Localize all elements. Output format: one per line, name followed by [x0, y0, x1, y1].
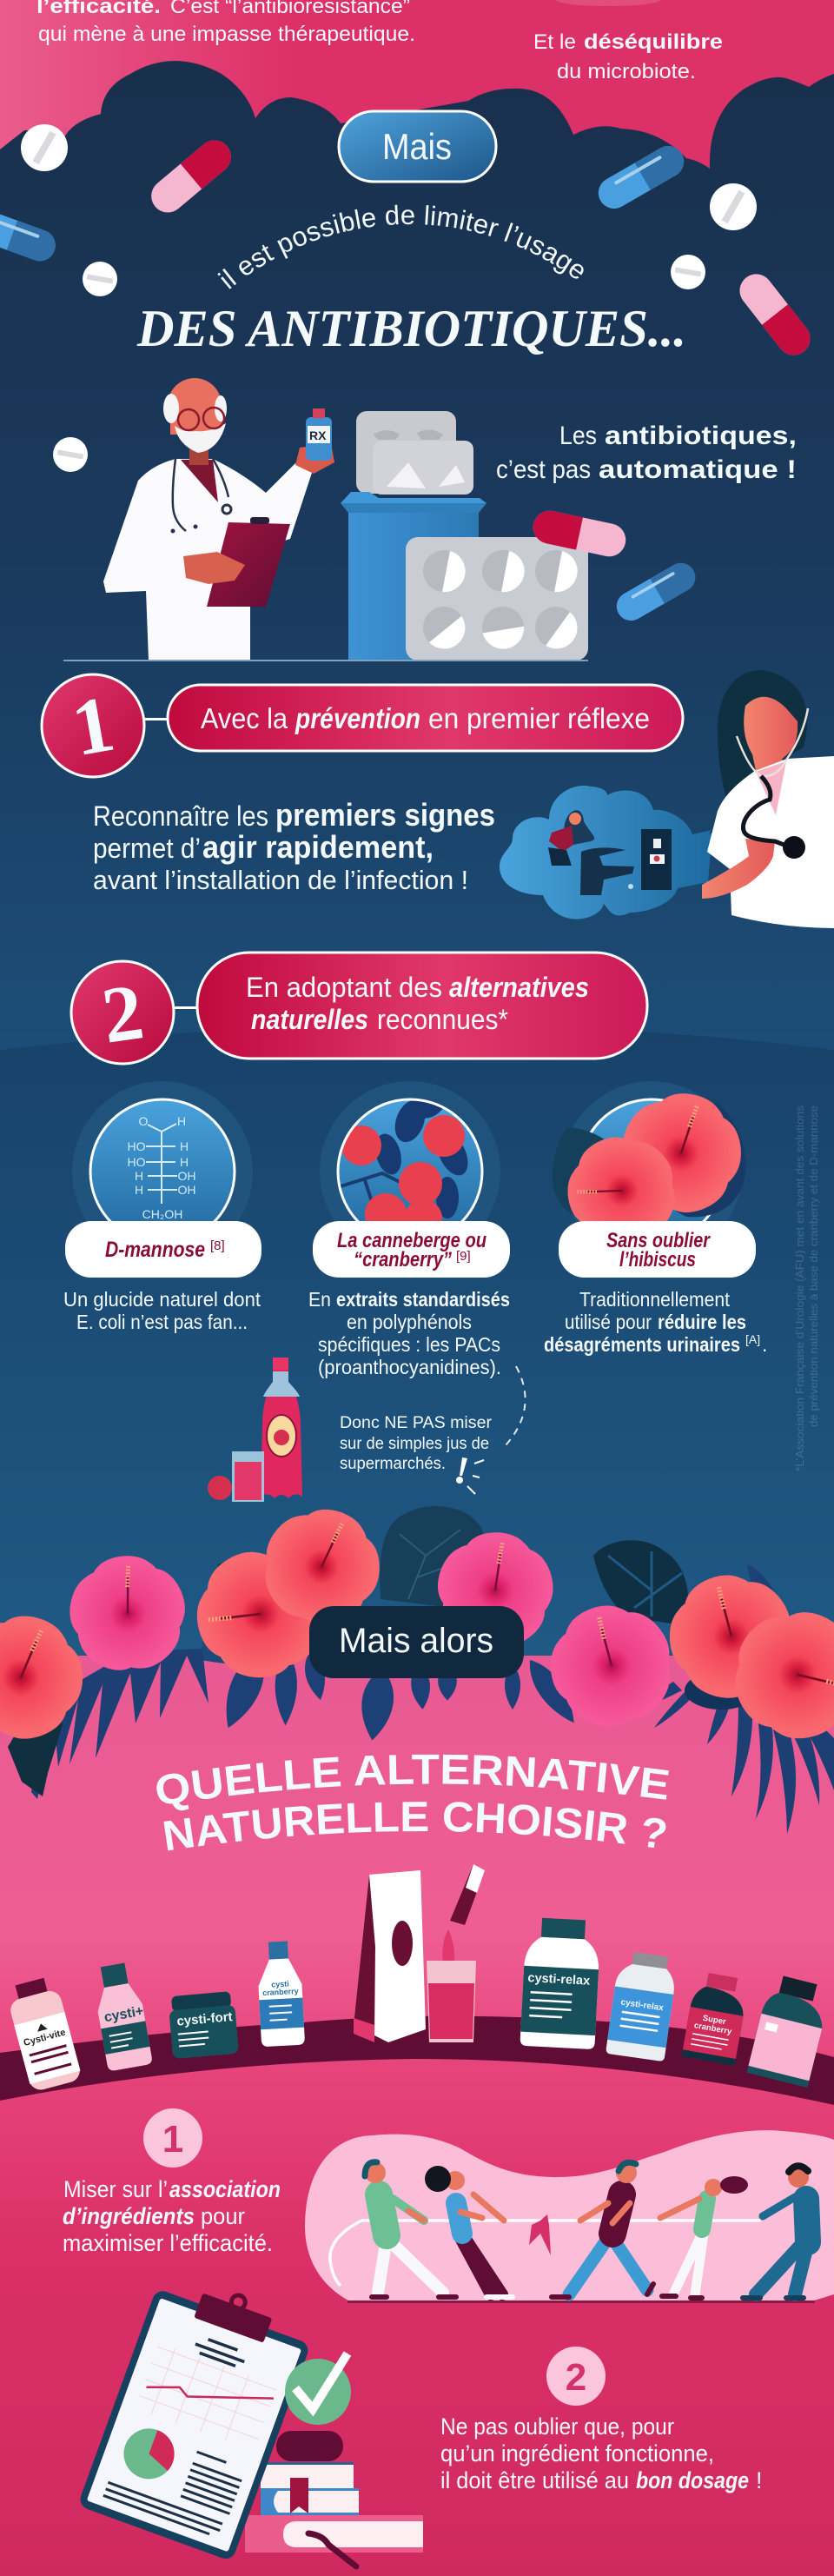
description: canneberge: extraits standardisés [336, 1288, 510, 1311]
navy cloud background [0, 61, 834, 1660]
text: bon dosage: bon dosage [636, 2467, 749, 2493]
product: cysti cranberry: cysti [271, 1979, 289, 1989]
description: hibiscus [544, 1288, 767, 1356]
report text lines [103, 2427, 246, 2539]
panel: D-mannose [63, 1081, 261, 1333]
description: hibiscus: réduire les [658, 1311, 746, 1333]
text: premiers signes [93, 797, 495, 895]
hanging blue leaves [215, 1645, 584, 1743]
footnote rotated [794, 1105, 820, 1471]
panel: D-mannose: CH₂OH [142, 1207, 182, 1221]
heading: quelle alternative [156, 1754, 669, 1851]
pill: prevention: en premier réflexe [428, 702, 650, 734]
number circle 1 [42, 674, 144, 777]
pink lower background [0, 1656, 834, 2576]
text: note on juices [340, 1414, 493, 1473]
glass [232, 1451, 264, 1502]
text: association d'ingredients: pour [201, 2203, 245, 2229]
panel: D-mannose: H [177, 1114, 186, 1128]
text: association d'ingredients: maximiser l’efficacité. [63, 2230, 273, 2256]
description: hibiscus: désagréments urinaires [544, 1333, 740, 1356]
text: note on juices: Donc NE PAS miser [340, 1414, 493, 1432]
text: premiers signes: avant l’installation de l’infection ! [93, 865, 468, 895]
heading: quelle alternative: QUELLE ALTERNATIVE [156, 1754, 669, 1811]
product: stick pouring [442, 1864, 485, 1973]
number circle 1: 1 [65, 679, 121, 773]
text: il est possible de limiter l’usage [217, 205, 584, 289]
illustration: books stack [245, 2431, 423, 2566]
text: premiers signes: Reconnaître les [93, 800, 268, 832]
line chart [136, 2343, 278, 2452]
description: canneberge: En [308, 1288, 331, 1311]
label: canneberge: “cranberry” [354, 1248, 452, 1271]
text: pas automatique: antibiotiques, [605, 422, 797, 450]
text: bon dosage: qu’un ingrédient fonctionne, [440, 2440, 714, 2466]
scattered pills [0, 124, 817, 472]
floral garland [0, 1489, 834, 1834]
badge: Mais alors [309, 1606, 524, 1678]
capsules near blister [530, 508, 700, 626]
label: canneberge: La canneberge ou [337, 1229, 486, 1252]
description: canneberge: en polyphénols [347, 1311, 472, 1333]
blister front [406, 537, 588, 661]
door [628, 829, 672, 890]
product: cysti-relax blue [606, 1950, 678, 2061]
footnote rotated: *L’Association Française d’Urologie (AFU) met en avant des solutions [794, 1105, 806, 1471]
dark patch on right palm [685, 1671, 758, 1710]
number circle 2 [71, 961, 174, 1064]
label: D-mannose: [8] [210, 1238, 225, 1253]
description: D-mannose [63, 1288, 261, 1333]
number circle: bottom 1 [143, 2108, 202, 2168]
illustration: thought cloud [500, 786, 712, 920]
product: cysti-fort [168, 1991, 239, 2059]
badge: Mais alors: Mais alors [339, 1622, 493, 1660]
label: canneberge: [9] [456, 1249, 471, 1264]
product: Super cranberry: cranberry [693, 2021, 733, 2037]
number circle: bottom 2 [546, 2347, 606, 2406]
text: bon dosage: il doit être utilisé au [440, 2467, 629, 2493]
panel: hibiscus [533, 1078, 767, 1356]
product: sachet box [354, 1870, 426, 2042]
text: antibioresistance [36, 0, 415, 46]
text: pas automatique [496, 422, 797, 484]
product: Super cranberry: Super [702, 2014, 727, 2027]
text: pas automatique: c’est pas [496, 455, 591, 484]
pill: alternatives naturelles: alternatives [449, 972, 589, 1003]
heading: quelle alternative: NATURELLE CHOISIR ? [163, 1802, 665, 1851]
description: hibiscus: utilisé pour [565, 1311, 652, 1333]
text: microbiote imbalance: Et le [533, 30, 576, 54]
illustration: nurse with stethoscope [702, 670, 834, 928]
step 1 header [42, 674, 683, 777]
pill: alternatives naturelles [197, 953, 647, 1059]
panel: D-mannose: HO [127, 1139, 146, 1153]
step 2 header [71, 953, 647, 1064]
label: hibiscus: l’hibiscus [619, 1248, 696, 1271]
text: pas automatique: automatique ! [599, 455, 797, 484]
person 5 [743, 2166, 809, 2298]
text: association d'ingredients: d’ingrédients [63, 2203, 195, 2229]
text: bon dosage: ! [756, 2467, 763, 2493]
cranberries image [341, 1100, 467, 1221]
left palm frond [31, 1649, 208, 1799]
text: microbiote imbalance: du microbiote. [557, 60, 696, 83]
description: hibiscus: Traditionnellement [579, 1288, 731, 1311]
pill: prevention: Avec la [201, 702, 288, 734]
label: hibiscus: Sans oublier [606, 1229, 711, 1252]
panel: D-mannose: H [180, 1155, 189, 1169]
product: cysti+: cysti+ [103, 2004, 145, 2025]
pill: alternatives naturelles: reconnues* [377, 1004, 508, 1035]
number circle: bottom 1: 1 [162, 2118, 183, 2161]
pill: prevention: prévention [295, 702, 420, 734]
bandana [529, 2214, 551, 2255]
person 4 [660, 2176, 748, 2298]
top pink section [0, 0, 834, 226]
illustration: clipboard with report [77, 2267, 318, 2561]
text: bon dosage [440, 2413, 763, 2493]
text: premiers signes: permet d’ [93, 833, 201, 864]
illustration: tug of war [305, 2130, 834, 2303]
description: canneberge: (proanthocyanidines). [318, 1356, 501, 1378]
product: Cysti-vite [4, 1975, 83, 2093]
badge: Mais: Mais [382, 126, 452, 167]
label: D-mannose [65, 1221, 261, 1278]
label: hibiscus [559, 1221, 756, 1278]
illustration: box and blister packs [341, 411, 588, 661]
text: premiers signes: premiers signes [275, 797, 495, 833]
illustration: doctor [103, 378, 334, 661]
panel: D-mannose: H [135, 1169, 143, 1183]
dark leaves behind [200, 1506, 791, 1669]
icon: exclamation mark [456, 1457, 484, 1494]
right palm frond [639, 1682, 834, 1834]
molecule formula [146, 1124, 177, 1204]
panel: D-mannose: HO [127, 1155, 146, 1169]
dark palm tip [8, 1703, 63, 1796]
label: canneberge [313, 1221, 510, 1278]
hibiscus flowers [0, 1489, 834, 1769]
person 3 [552, 2162, 653, 2297]
hibiscus image [533, 1078, 762, 1257]
icon: green check [285, 2354, 351, 2425]
product: cysti+ [90, 1961, 153, 2072]
blob background [305, 2130, 834, 2300]
text: bon dosage: Ne pas oublier que, pour [440, 2413, 674, 2440]
panel: D-mannose: H [180, 1139, 189, 1153]
panel: D-mannose: OH [177, 1183, 196, 1197]
shelf [0, 2016, 834, 2105]
product: glass [427, 1961, 476, 2042]
text: pas automatique: Les [559, 422, 597, 450]
illustration: juice bottle and glass [208, 1358, 302, 1502]
panel: D-mannose: O [139, 1114, 149, 1128]
badge: Mais [339, 111, 496, 182]
text: note on juices: supermarchés. [340, 1455, 446, 1473]
text: association d'ingredients: association [169, 2176, 281, 2202]
description: canneberge: spécifiques : les PACs [318, 1333, 500, 1356]
panel: canneberge [308, 1073, 510, 1378]
curved subtitle [228, 224, 582, 290]
raspberries [208, 1476, 232, 1500]
products on shelf [4, 1864, 832, 2093]
pill: prevention [168, 685, 683, 751]
faucet [580, 847, 634, 895]
text: premiers signes: agir rapidement, [202, 829, 434, 865]
panel: D-mannose: H [135, 1183, 143, 1197]
clip [194, 2283, 275, 2343]
product: dark jar [747, 1973, 832, 2088]
report header lines [193, 2336, 248, 2368]
icon: RX bottle [306, 408, 332, 461]
woman in cloud [548, 810, 594, 866]
product: cysti cranberry: cranberry [262, 1987, 299, 1997]
clipboard held by doctor [183, 517, 290, 607]
description: hibiscus: [A] [745, 1332, 760, 1346]
number circle: bottom 2: 2 [566, 2356, 586, 2399]
product: Super cranberry [681, 1971, 750, 2066]
product: cysti-relax blue: cysti-relax [620, 1998, 665, 2013]
icon: RX bottle: RX [309, 428, 327, 442]
pill: alternatives naturelles: En adoptant des [246, 972, 442, 1003]
product: cysti-fort: cysti-fort [176, 2009, 233, 2029]
dashed arrow [506, 1366, 526, 1445]
product: cysti-relax dark [520, 1917, 601, 2049]
pill: alternatives naturelles: naturelles [251, 1004, 368, 1035]
person 1 [365, 2162, 456, 2297]
text: association d'ingredients [63, 2176, 281, 2256]
rope [330, 2221, 761, 2286]
panel: D-mannose: OH [177, 1169, 196, 1183]
text: antibioresistance: qui mène à une impasse thérapeutique. [38, 23, 415, 46]
product: cysti-relax dark: cysti-relax [527, 1971, 591, 1988]
headline: des antibiotiques: DES ANTIBIOTIQUES... [136, 300, 686, 357]
description: D-mannose: Un glucide naturel dont [63, 1288, 261, 1311]
lower dome background [0, 1025, 834, 1669]
number circle 2: 2 [96, 966, 149, 1060]
text: microbiote imbalance [533, 30, 723, 83]
text: note on juices: sur de simples jus de [340, 1435, 489, 1453]
product: Cysti-vite: Cysti-vite [23, 2028, 67, 2048]
text: association d'ingredients: Miser sur l’ [63, 2176, 168, 2202]
description: canneberge [308, 1288, 510, 1378]
description: D-mannose: E. coli n’est pas fan... [76, 1311, 248, 1333]
text: microbiote imbalance: déséquilibre [584, 30, 723, 54]
label: D-mannose: D-mannose [105, 1238, 205, 1262]
description: hibiscus: . [762, 1333, 767, 1356]
pie chart [116, 2421, 182, 2486]
product: cysti cranberry [256, 1941, 305, 2047]
footnote rotated: de prévention naturelles à base de cranberry et de D-mannose [808, 1105, 820, 1427]
person 2 [425, 2166, 513, 2297]
